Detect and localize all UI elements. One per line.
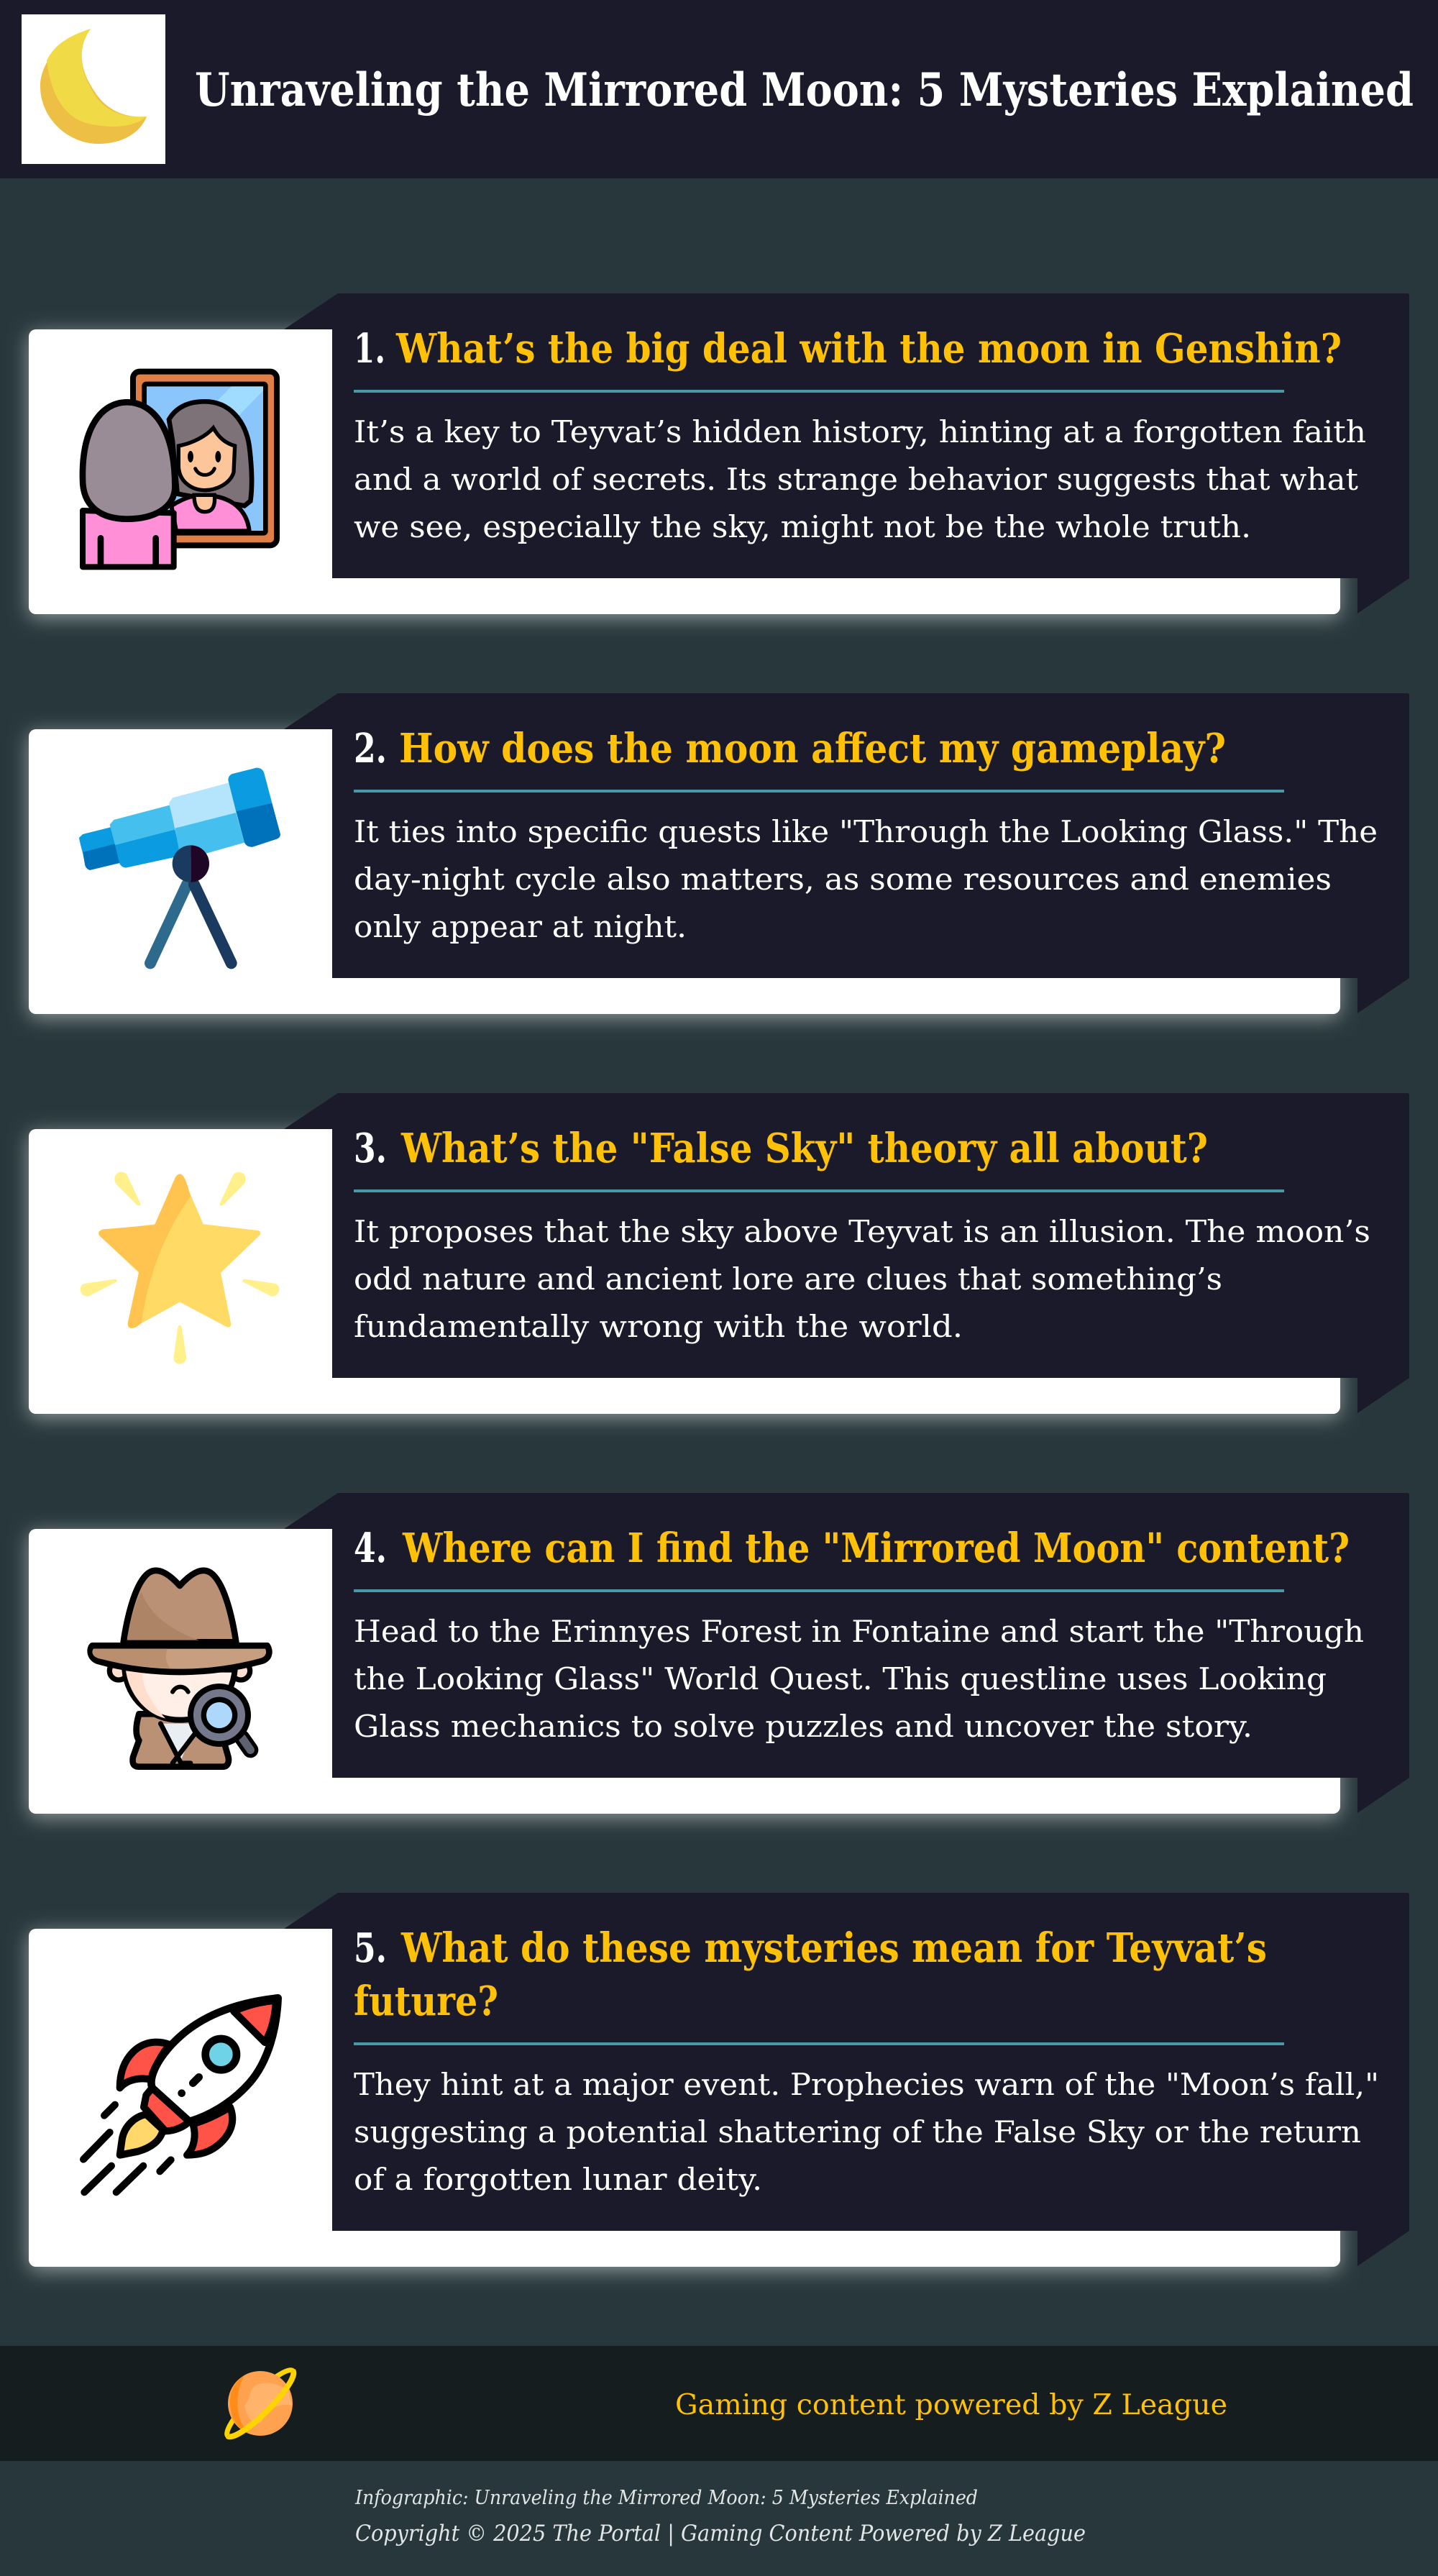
body: answer 4: Glass mechanics to solve puzzles and uncover the story. [354,1709,1252,1744]
heading: question 2: 2. [354,725,387,772]
body: answer 4: Head to the Erinnyes Forest in Fontaine and start the "Through [354,1614,1364,1649]
body: answer 5: They hint at a major event. Prophecies warn of the "Moon’s fall," [354,2067,1379,2102]
heading: question 5: What do these mysteries mean for Teyvat’s [400,1924,1267,1972]
icon: ringed planet [221,2364,300,2443]
header band [0,0,1438,178]
panel: question 2 [29,693,1409,1014]
heading: question 2: How does the moon affect my gameplay? [399,725,1226,772]
body: answer 5 [354,2067,1379,2197]
heading: question 1: 1. [354,325,385,373]
body: answer 3: fundamentally wrong with the world. [354,1309,963,1344]
body: answer 2: only appear at night. [354,909,687,944]
icon: rocket [83,1998,278,2192]
footer tagline: Gaming content powered by Z League [675,2389,1227,2421]
body: answer 1: and a world of secrets. Its strange behavior suggests that what [354,462,1358,497]
icon: crescent moon [22,14,165,164]
icon: detective [91,1571,269,1767]
body: answer 3 [354,1214,1370,1344]
heading: question 3: 3. [354,1125,387,1172]
panel: question 1 [29,293,1409,614]
body: answer 4 [354,1614,1364,1744]
footer band [0,2346,1438,2461]
body: answer 1 [354,414,1366,544]
heading: question 5: 5. [354,1924,387,1972]
body: answer 1: It’s a key to Teyvat’s hidden history, hinting at a forgotten faith [354,414,1366,449]
body: answer 2: It ties into specific quests like "Through the Looking Glass." The [354,814,1378,849]
body: answer 5: of a forgotten lunar deity. [354,2162,762,2197]
body: answer 2 [354,814,1378,944]
heading: question 1: What’s the big deal with the moon in Genshin? [395,325,1342,373]
panel: question 4 [29,1493,1409,1814]
heading: question 3: What’s the "False Sky" theory all about? [400,1125,1208,1172]
icon: shining star [81,1172,279,1364]
body: answer 3: odd nature and ancient lore are clues that something’s [354,1261,1222,1297]
credit line: Infographic: Unraveling the Mirrored Moon: 5 Mysteries Explained [354,2487,978,2509]
icon: telescope [79,768,280,963]
panel: question 5 [29,1893,1409,2267]
body: answer 3: It proposes that the sky above Teyvat is an illusion. The moon’s [354,1214,1370,1249]
heading: question 4: 4. [354,1525,387,1572]
copyright line: Copyright © 2025 The Portal | Gaming Content Powered by Z League [355,2521,1086,2547]
body: answer 5: suggesting a potential shattering of the False Sky or the return [354,2114,1361,2150]
heading: question 5 [354,1924,1267,2025]
body: answer 4: the Looking Glass" World Quest. This questline uses Looking [354,1661,1327,1696]
heading: question 5: future? [354,1978,498,2025]
body: answer 1: we see, especially the sky, might not be the whole truth. [354,509,1251,544]
body: answer 2: day-night cycle also matters, as some resources and enemies [354,862,1332,897]
panel: question 3 [29,1093,1409,1414]
icon: person and mirror [83,372,277,567]
